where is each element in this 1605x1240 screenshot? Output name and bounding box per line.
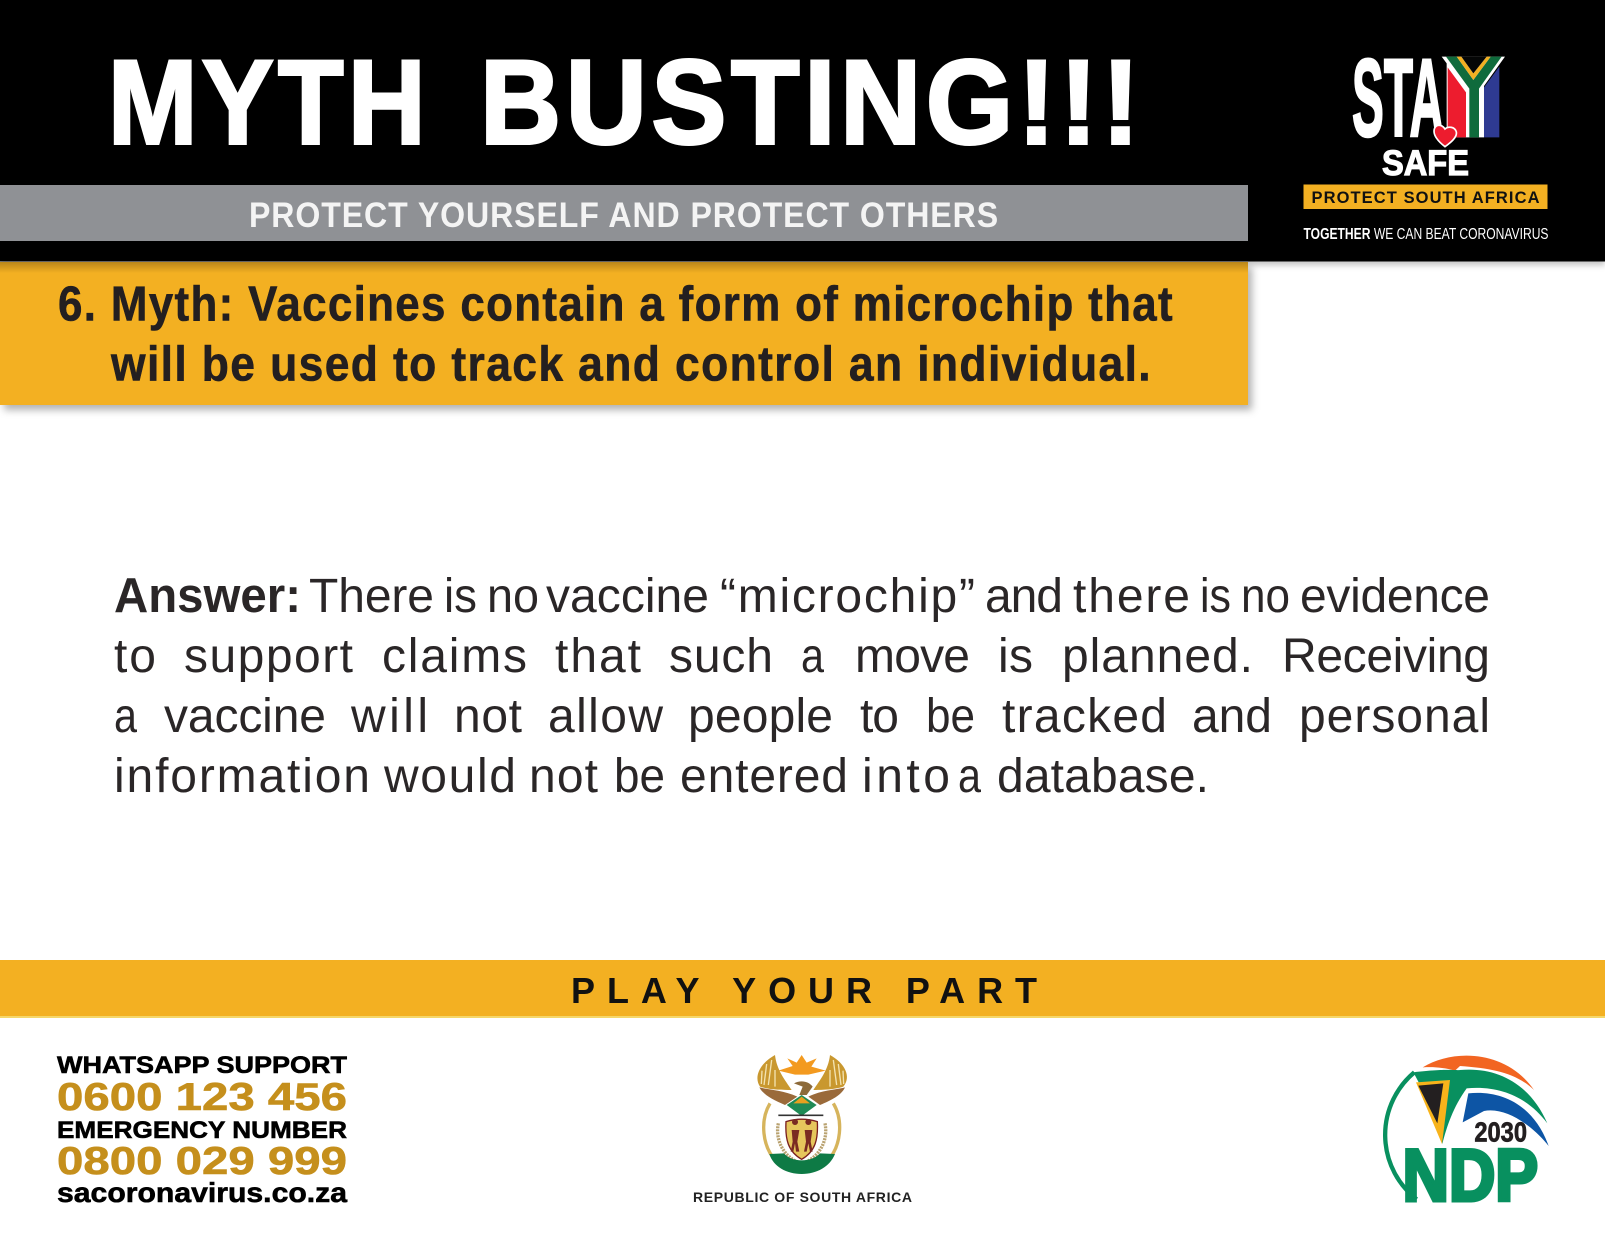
answer text xyxy=(114,569,1490,803)
title: BUSTING!!! xyxy=(480,36,1144,170)
wing feather lines xyxy=(761,1060,844,1087)
title: MYTH xyxy=(108,36,430,170)
blue swoosh xyxy=(1463,1093,1549,1146)
subtitle bar: PROTECT YOURSELF AND PROTECT OTHERS xyxy=(249,195,999,235)
play your part band xyxy=(0,960,1605,1018)
answer text: would xyxy=(383,750,516,803)
answer text: is xyxy=(998,630,1033,683)
eagle head xyxy=(794,1081,813,1095)
answer text: information xyxy=(114,750,370,803)
answer text: not xyxy=(454,690,522,743)
contact details: EMERGENCY NUMBER xyxy=(57,1117,347,1144)
answer text: that xyxy=(555,630,641,683)
answer text: and xyxy=(1192,690,1272,743)
spear xyxy=(778,1113,823,1118)
logo tagline: TOGETHER WE CAN BEAT CORONAVIRUS xyxy=(1304,226,1548,243)
label NDP: NDP xyxy=(1403,1134,1538,1216)
answer text: a xyxy=(801,630,824,683)
wings xyxy=(757,1055,792,1090)
answer text: claims xyxy=(382,630,527,683)
answer text: no xyxy=(487,570,539,623)
answer text: there xyxy=(1073,570,1190,623)
icon: flag Y xyxy=(1442,57,1505,137)
figures xyxy=(791,1119,799,1152)
play your part band: PLAY YOUR PART xyxy=(571,970,1037,1011)
logo word SAFE: SAFE xyxy=(1382,144,1469,183)
shield xyxy=(786,1119,817,1159)
answer text: such xyxy=(669,630,773,683)
logo: stay safe xyxy=(1304,37,1548,243)
answer text: a xyxy=(114,690,137,743)
logo: stay safe: STA xyxy=(1352,37,1444,160)
answer text: vaccine xyxy=(164,690,326,743)
answer text: Receiving xyxy=(1282,630,1490,683)
answer text: not xyxy=(529,750,598,803)
contact details: 0600 123 456 xyxy=(57,1076,347,1119)
header band xyxy=(0,0,1605,262)
wheat xyxy=(778,1123,797,1162)
answer text: tracked xyxy=(1002,690,1167,743)
protea xyxy=(787,1095,817,1116)
answer text: a xyxy=(958,750,981,803)
answer text: Answer: xyxy=(114,569,301,623)
answer text: to xyxy=(860,690,899,743)
answer text: allow xyxy=(548,690,663,743)
motto ribbon xyxy=(769,1153,835,1174)
answer text: people xyxy=(688,690,833,743)
answer text: into xyxy=(862,750,950,803)
answer text: evidence xyxy=(1300,570,1490,623)
answer text: be xyxy=(926,690,975,743)
answer text: There xyxy=(309,570,434,623)
answer text: be xyxy=(614,750,665,803)
answer text: will xyxy=(350,690,428,743)
contact details xyxy=(57,1052,347,1208)
contact details: sacoronavirus.co.za xyxy=(57,1177,347,1208)
myth heading panel: 6. Myth: Vaccines contain a form of microchip that xyxy=(58,278,1174,332)
answer text: entered xyxy=(680,750,848,803)
contact details: 0800 029 999 xyxy=(57,1140,347,1183)
title xyxy=(108,36,1144,170)
answer text: no xyxy=(1241,570,1290,623)
answer text: vaccine xyxy=(546,570,709,623)
answer text: is xyxy=(1200,570,1231,623)
answer text: is xyxy=(444,570,477,623)
subtitle bar xyxy=(0,185,1248,241)
republic of south africa label: REPUBLIC OF SOUTH AFRICA xyxy=(693,1189,912,1205)
green swoosh xyxy=(1413,1070,1547,1144)
green ring xyxy=(1385,1072,1417,1199)
label 2030: 2030 xyxy=(1474,1117,1527,1148)
contact details: WHATSAPP SUPPORT xyxy=(57,1052,347,1079)
logo: NDP 2030 xyxy=(1385,1056,1549,1216)
sun xyxy=(778,1055,826,1075)
protect south africa tag xyxy=(1304,184,1548,209)
myth heading panel xyxy=(0,262,1248,405)
orange arc xyxy=(1423,1056,1534,1090)
tusks xyxy=(764,1103,777,1162)
answer text: “microchip” xyxy=(720,570,975,623)
answer text: and xyxy=(985,570,1063,623)
answer text: database. xyxy=(997,750,1209,803)
answer text: to xyxy=(114,630,156,683)
icon: heart xyxy=(1434,125,1456,147)
black triangle xyxy=(1416,1080,1450,1144)
protect south africa tag: PROTECT SOUTH AFRICA xyxy=(1312,189,1540,207)
answer text: support xyxy=(184,630,353,683)
answer text: move xyxy=(855,630,970,683)
icon: coat of arms xyxy=(757,1055,847,1174)
answer text: planned. xyxy=(1062,630,1253,683)
myth heading panel: will be used to track and control an individual. xyxy=(110,338,1152,392)
answer text: personal xyxy=(1299,690,1490,743)
